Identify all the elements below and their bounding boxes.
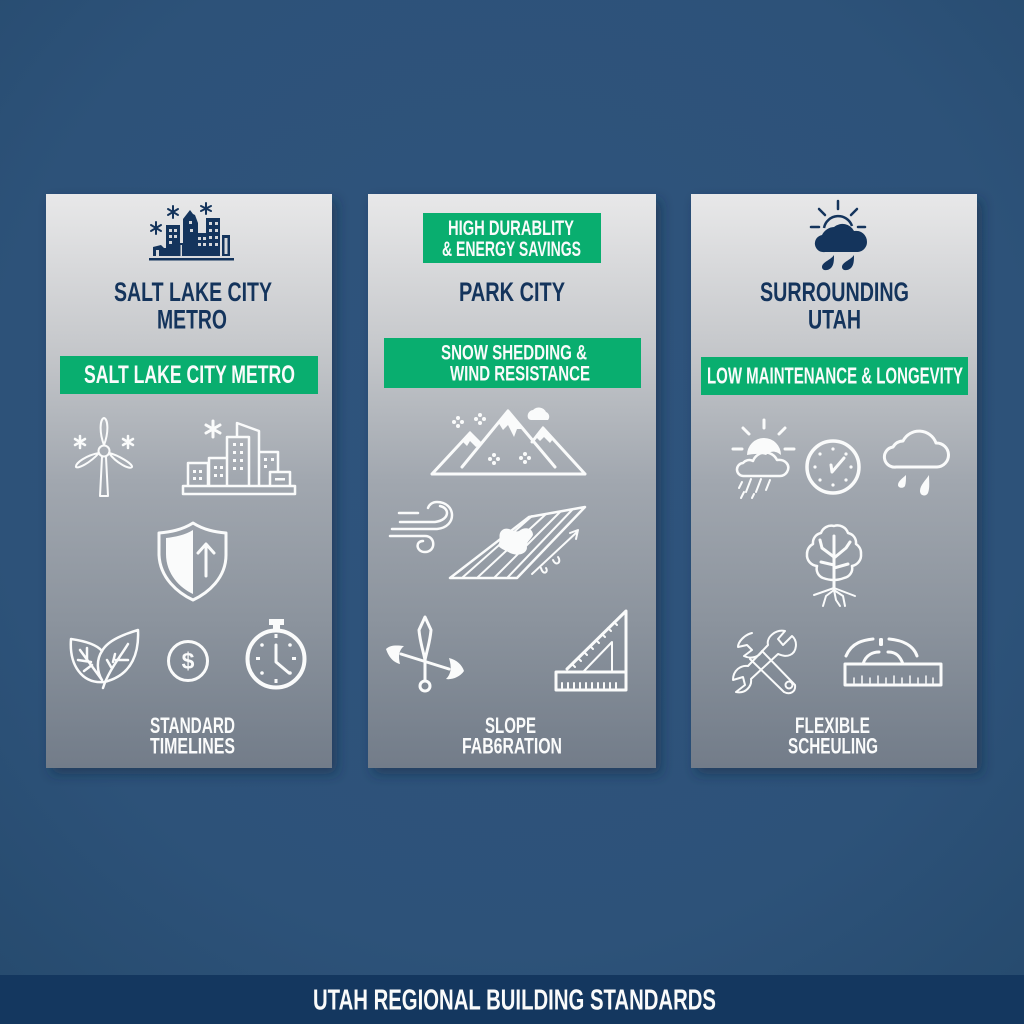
heading: Salt Lake City Metro: SALT LAKE CITY: [114, 277, 272, 307]
icon: set square: [556, 611, 626, 690]
panel: Salt Lake City Metro: [46, 194, 332, 768]
caption: Slope Fabrication: FAB6RATION: [462, 734, 562, 758]
heading: Park City: PARK CITY: [459, 277, 565, 307]
heading: Surrounding Utah: SURROUNDING: [760, 277, 909, 307]
icon: roof panel with snow patch and arrow: [450, 507, 585, 578]
icon: snowy mountains: [432, 408, 585, 474]
caption: Flexible Scheuling: FLEXIBLE: [795, 713, 870, 738]
icon: anemometer: [386, 617, 464, 691]
heading: Salt Lake City Metro: METRO: [157, 304, 227, 334]
icon: tree with roots: [807, 525, 861, 606]
icon: clock: [807, 441, 859, 493]
icon: shield with arrow: [159, 523, 226, 600]
icon: dollar coin: $: [182, 648, 195, 674]
banner: Salt Lake City Metro: SALT LAKE CITY METRO: [84, 361, 295, 389]
caption: Flexible Scheuling: SCHEULING: [788, 734, 878, 758]
icon: wind: [390, 502, 452, 552]
caption: Slope Fabrication: SLOPE: [485, 713, 536, 738]
heading: Surrounding Utah: UTAH: [808, 304, 861, 334]
icon: stopwatch: [248, 619, 304, 688]
panel: Surrounding Utah: [691, 194, 977, 768]
icon: sun, cloud and rain: [733, 420, 794, 498]
banner: Snow Shedding and Wind Resistance: WIND RESISTANCE: [450, 362, 590, 386]
banner: Snow Shedding and Wind Resistance: [384, 338, 641, 388]
caption: Standard Timelines: [150, 713, 235, 758]
icon: snowy city skyline: [149, 203, 234, 260]
heading: Surrounding Utah: [760, 277, 909, 334]
caption: Slope Fabrication: [462, 713, 562, 758]
banner: Snow Shedding and Wind Resistance: SNOW SHEDDING &: [441, 340, 587, 364]
icon: rain cloud outline: [884, 431, 948, 495]
banner: High Durablity and Energy Savings: & ENERGY SAVINGS: [442, 237, 581, 261]
caption: Flexible Scheuling: [788, 713, 878, 758]
banner: Low Maintenance and Longevity: [701, 357, 968, 395]
icon: protractor ruler: [845, 638, 941, 685]
icon: wind turbine: [75, 418, 133, 496]
banner: Salt Lake City Metro: [60, 356, 318, 394]
icon: leaves: [71, 630, 138, 688]
banner: High Durablity and Energy Savings: HIGH DURABLITY: [448, 216, 574, 240]
icon: city outline with snowflake: [183, 421, 295, 494]
banner: High Durablity and Energy Savings: [423, 213, 601, 263]
caption: Standard Timelines: TIMELINES: [150, 734, 235, 758]
icon: sun behind rain cloud: [811, 201, 867, 270]
heading: Salt Lake City Metro: [114, 277, 272, 334]
footer bar: UTAH REGIONAL BUILDING STANDARDS: [313, 984, 716, 1016]
panel: Park City: [368, 194, 656, 768]
caption: Standard Timelines: STANDARD: [150, 713, 235, 738]
footer bar: [0, 975, 1024, 1024]
icon: crossed wrenches: [733, 631, 796, 693]
icon: dollar coin: [168, 642, 208, 680]
